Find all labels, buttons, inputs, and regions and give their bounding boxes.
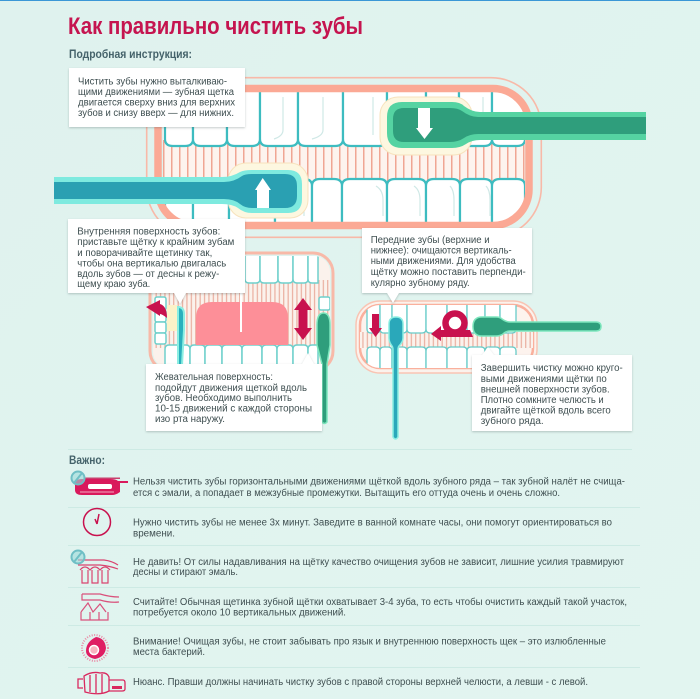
callout: chewing surface: подойдут движения щеткой вдоль [155, 383, 307, 394]
tongue [196, 290, 288, 345]
tip 3: do not press: Не давить! От силы надавливания на щётку качество очищения зубов не зависит, лишние усилия травмируют [133, 556, 624, 568]
toothbrush: green, upper teeth [380, 97, 646, 155]
tip 2: three minutes: времени. [133, 528, 175, 540]
heading: important: Важно: [69, 455, 105, 467]
tip 3: do not press [72, 550, 624, 583]
tip 5: tongue and cheeks: Внимание! Очищая зубы, не стоит забывать про язык и внутреннюю поверхность щек – это излюбленные [133, 636, 606, 648]
callout: front teeth: кулярно зубному ряду. [371, 277, 470, 289]
mouth diagram: front teeth [356, 301, 601, 439]
callout: inner surface: и поворачивайте щетинку так, [77, 248, 212, 259]
tip 1: no horizontal brushing: Нельзя чистить зубы горизонтальными движениями щёткой вдоль зубного ряда – так зубной налёт не счища- [133, 476, 625, 488]
icon: crossed-out brush [72, 472, 128, 495]
toothbrush: teal, lower teeth [54, 163, 308, 218]
toothbrush: green horizontal [473, 317, 601, 336]
callout: chewing surface [146, 353, 322, 431]
icon: double vertical arrow [294, 298, 312, 340]
main mouth illustration [147, 78, 541, 237]
callout: push-out motions: щими движениями — зубная щетка [78, 86, 234, 98]
callout: push-out motions: двигается сверху вниз для верхних [78, 98, 235, 108]
callout: push-out motions: зубов и снизу вверх — для нижних. [78, 107, 234, 119]
callout: push-out motions [69, 68, 245, 127]
tip 1: no horizontal brushing [72, 472, 625, 499]
callout: finishing: двигайте щёткой вдоль всего [481, 406, 611, 416]
callout: finishing: Завершить чистку можно круго- [481, 363, 623, 374]
tip 6: right and left handed [78, 672, 588, 694]
callout: inner surface [68, 219, 245, 304]
callout: chewing surface: изо рта наружу. [155, 414, 225, 425]
callout: front teeth [362, 228, 532, 303]
tip 4: count: потребуется около 10 вертикальных движений. [133, 606, 346, 618]
icon: clock [84, 508, 110, 536]
tip 2: three minutes: Нужно чистить зубы не менее 3х минут. Заведите в ванной комнате часы, они помогут ориентироваться во [133, 516, 612, 528]
callout: push-out motions: Чистить зубы нужно выталкиваю- [78, 76, 227, 88]
tip 3: do not press: десны и стирают эмаль. [133, 567, 238, 578]
toothbrush: teal vertical [389, 317, 403, 439]
callout: front teeth: щётку можно поставить перпенди- [371, 267, 526, 278]
tip 2: three minutes [84, 508, 612, 540]
mouth diagram: inner and chewing surfaces [146, 253, 333, 424]
icon: brush over teeth outline [81, 594, 119, 620]
tip 4: count: Считайте! Обычная щетинка зубной щётки охватывает 3-4 зуба, то есть чтобы очистить каждый такой участок, [133, 596, 627, 608]
tip 4: count [81, 594, 627, 620]
icon: up arrow [255, 178, 271, 208]
tip 6: right and left handed: Нюанс. Правши должны начинать чистку зубов с правой стороны верхней челюсти, а левши - с левой. [133, 676, 588, 688]
callout: inner surface: вдоль зубов — от десны к режу- [77, 268, 219, 280]
callout: front teeth: Передние зубы (верхние и [371, 234, 490, 246]
subtitle: detailed instructions: Подробная инструкция: [69, 49, 192, 61]
callout: inner surface: приставьте щётку к крайним зубам [77, 236, 234, 248]
callout: chewing surface: зубов. Необходимо выполнить [155, 392, 292, 404]
callout: finishing [472, 347, 632, 431]
callout: front teeth: нижнее): очищаются вертикаль- [371, 246, 512, 256]
callout: inner surface: чтобы она вертикалью двигалась [77, 258, 226, 270]
callout: finishing: внешней поверхности зубов. [481, 384, 610, 396]
icon: red down arrow [369, 314, 382, 337]
callout: chewing surface: Жевательная поверхность: [155, 372, 273, 383]
tip 1: no horizontal brushing: ется с эмали, а попадает в межзубные промежутки. Вытащить его оттуда очень и очень сложно. [133, 487, 560, 499]
callout: inner surface: Внутренняя поверхность зубов: [77, 226, 220, 238]
icon: crossed-out brush on teeth [72, 550, 118, 583]
tip 5: tongue and cheeks [82, 635, 606, 661]
icon: circular arrow [431, 314, 473, 341]
toothbrush: green, chewing surface [317, 313, 330, 424]
icon: down arrow [416, 108, 433, 139]
callout: front teeth: ными движениями. Для удобства [371, 255, 516, 267]
callout: inner surface: щему краю зуба. [77, 278, 150, 290]
title: Как правильно чистить зубы [68, 13, 363, 40]
toothbrush: teal, inner surface [167, 305, 184, 365]
callout: finishing: Плотно сомкните челюсть и [481, 395, 604, 406]
icon: fist holding brush [78, 672, 125, 694]
tip 5: tongue and cheeks: места бактерий. [133, 646, 205, 658]
callout: finishing: зубного ряда. [481, 415, 544, 427]
callout: chewing surface: 10-15 движений с каждой стороны [155, 404, 312, 414]
icon: turning arrow [146, 300, 167, 318]
callout: finishing: выми движениями щётки по [481, 374, 607, 385]
icon: tongue with bacteria [82, 635, 108, 661]
